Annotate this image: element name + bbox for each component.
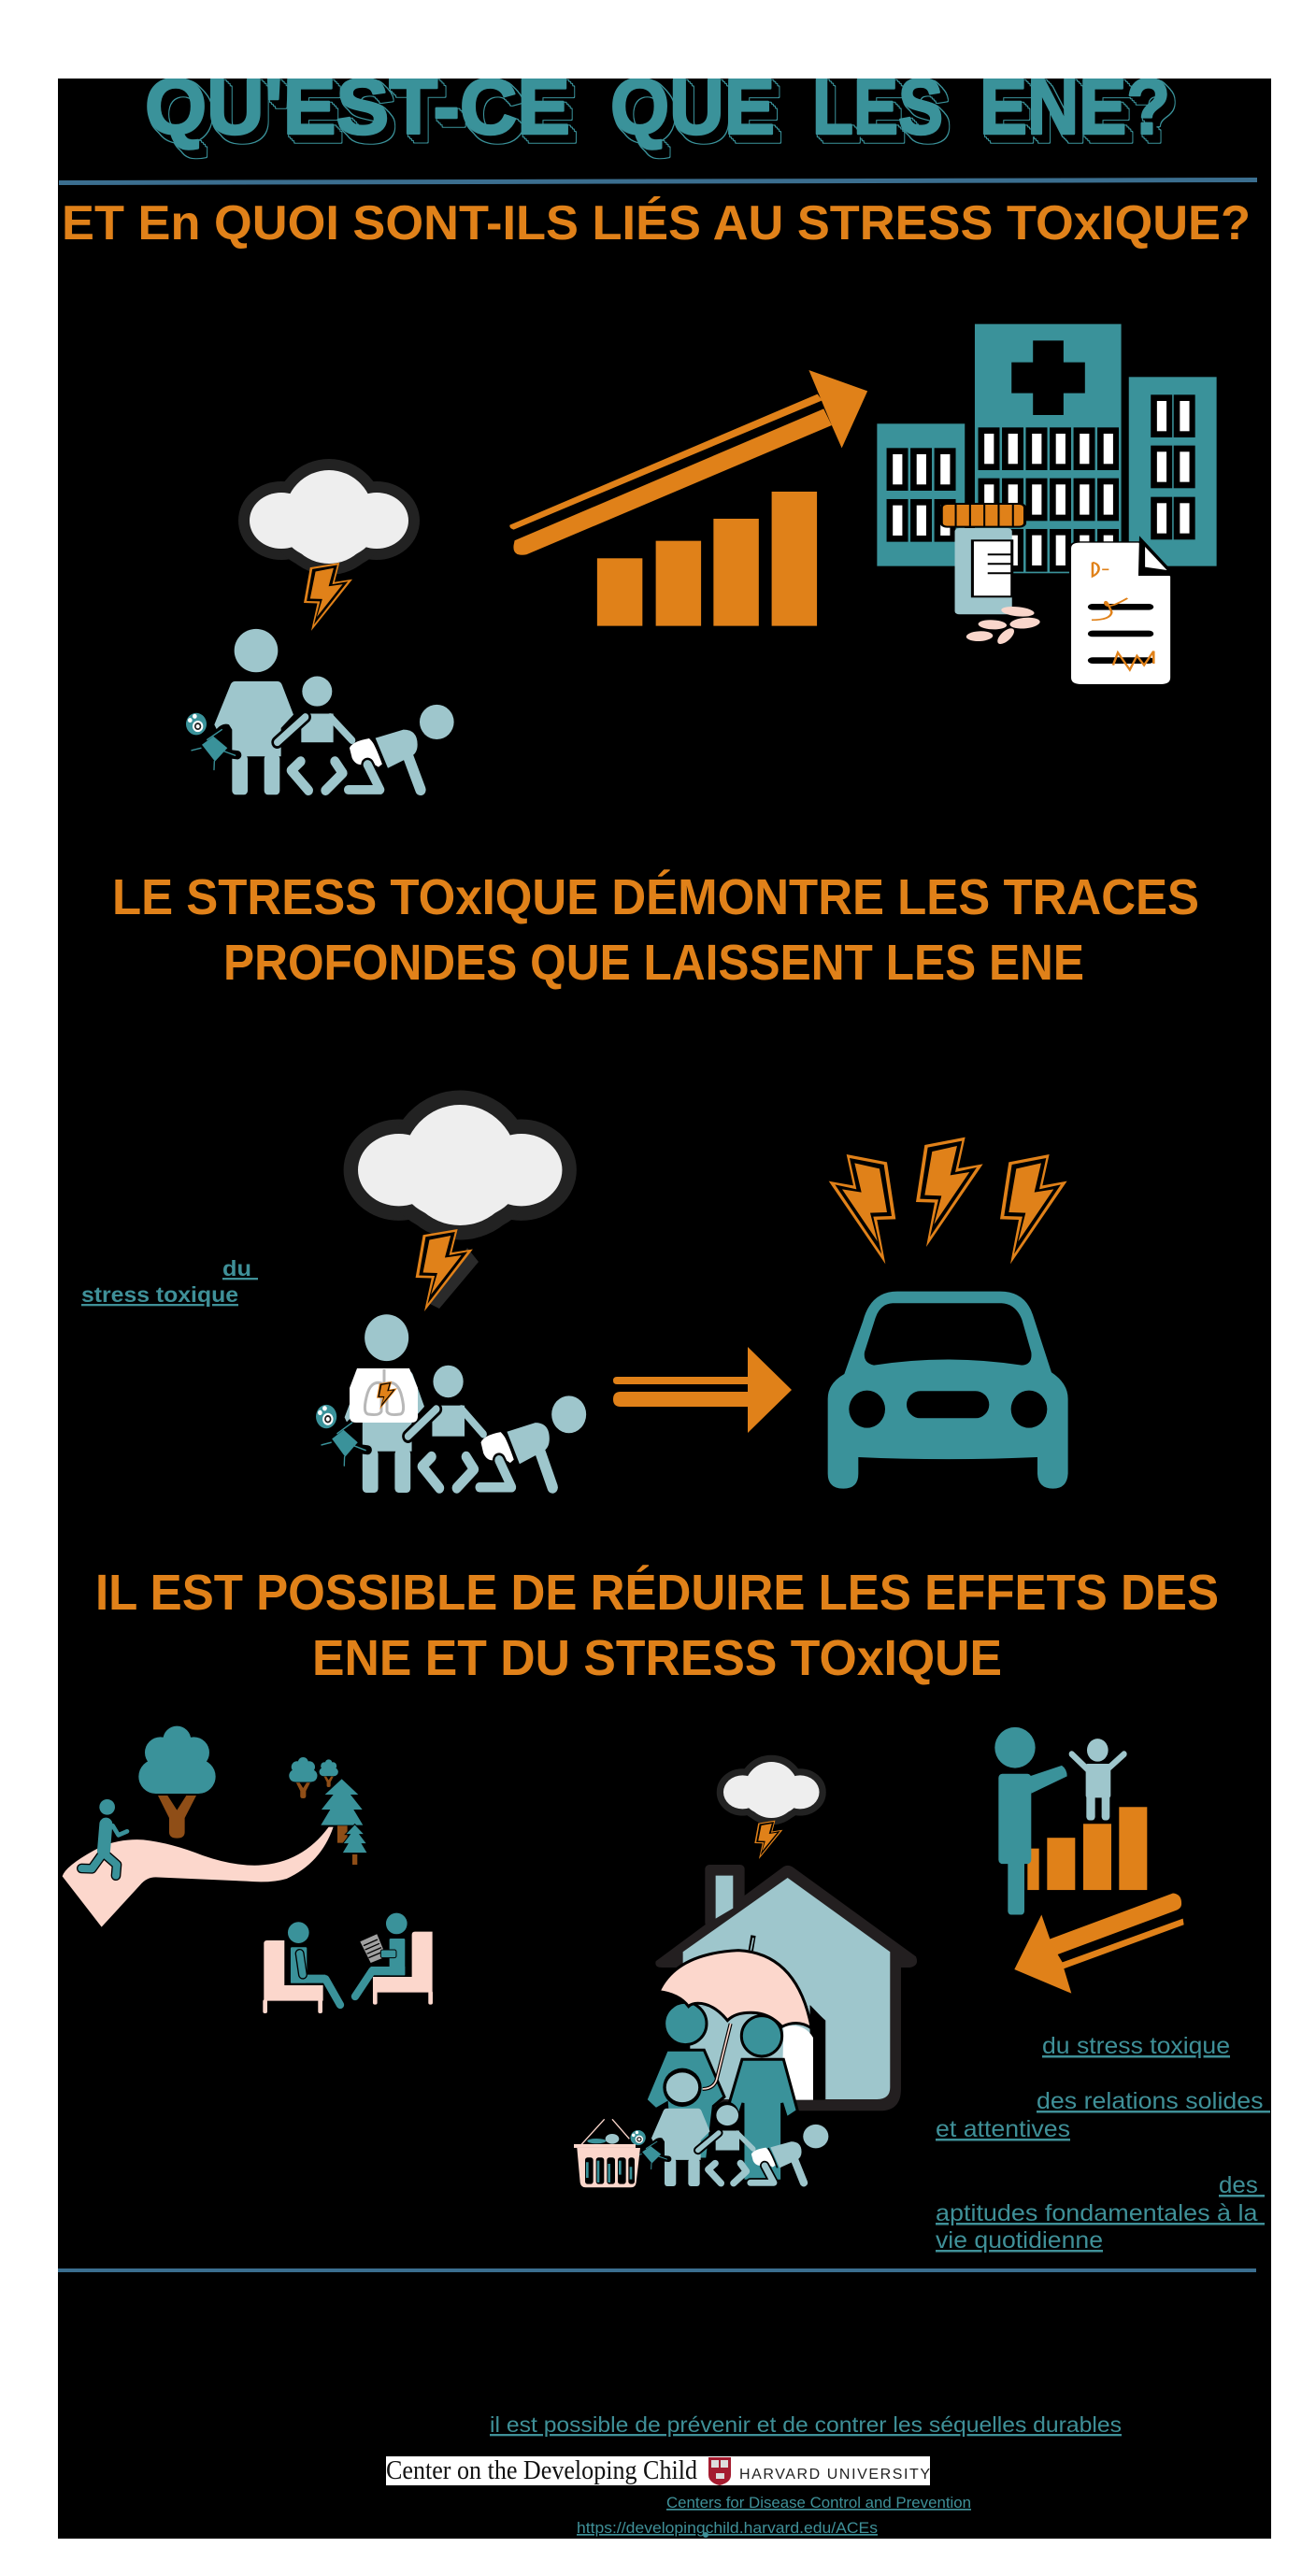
icon: adult supporting child on bars [994, 1727, 1147, 1914]
arrow: reducing arrow pointing down-left [1014, 1894, 1184, 1994]
title: ENE? [980, 63, 1170, 150]
heading: effects can be reduced: ENE ET DU STRESS TOxIQUE [312, 1630, 1002, 1686]
text block: conclusion: il est possible de prévenir et de contrer les séquelles durables [490, 2412, 1122, 2437]
heading: effects can be reduced: IL EST POSSIBLE DE RÉDUIRE LES EFFETS DES [95, 1565, 1219, 1621]
title [145, 63, 1170, 150]
text block: list of protective factors [936, 2033, 1270, 2254]
text block: toxic stress link [81, 1256, 258, 1307]
text block: list of protective factors: vie quotidienne [936, 2227, 1103, 2254]
heading: toxic stress leaves deep traces [112, 869, 1199, 991]
text block: list of protective factors: des relations solides [1037, 2088, 1270, 2114]
heading: toxic stress leaves deep traces: PROFONDES QUE LAISSENT LES ENE [223, 935, 1084, 991]
text block: sources [577, 2494, 971, 2538]
logo: Center on the Developing Child, Harvard University: Center on the Developing Child [386, 2455, 697, 2485]
title: LES [812, 63, 943, 150]
divider: bottom rule [58, 2268, 1256, 2272]
icon: car with lightning bolts [828, 1138, 1068, 1489]
heading: toxic stress leaves deep traces: LE STRESS TOxIQUE DÉMONTRE LES TRACES [112, 869, 1199, 925]
text block: list of protective factors: des [1219, 2172, 1265, 2198]
icon: hospital, medicine and prescription [877, 324, 1217, 685]
logo: Center on the Developing Child, Harvard University: HARVARD UNIVERSITY [739, 2467, 930, 2483]
icon: family under large storm with lungs [316, 1105, 586, 1493]
title: QU'EST-CE [145, 63, 570, 150]
arrow: double right arrow [613, 1347, 792, 1433]
text block: list of protective factors: aptitudes fondamentales à la [936, 2200, 1265, 2226]
title: QUE [610, 63, 775, 150]
icon: counselling session [263, 1913, 433, 2013]
icon: path through trees with walker [63, 1726, 367, 1927]
divider: top rule [59, 178, 1257, 185]
text block: toxic stress link: stress toxique [81, 1282, 238, 1307]
text block: toxic stress link: du [222, 1256, 258, 1281]
icon: family under storm cloud [186, 470, 454, 794]
logo: Center on the Developing Child, Harvard University [386, 2455, 930, 2485]
text block: list of protective factors: et attentives [936, 2116, 1070, 2142]
heading: subtitle: ET En QUOI SONT-ILS LIÉS AU STRESS TOxIQUE? [62, 196, 1251, 250]
text block: list of protective factors: du stress toxique [1042, 2033, 1230, 2059]
text block: sources: https://developingchild.harvard.edu/ACEs [577, 2519, 878, 2537]
text block: sources: Centers for Disease Control and Prevention [666, 2494, 971, 2512]
icon: protected family with house and umbrella [574, 1762, 917, 2187]
heading: effects can be reduced [95, 1565, 1219, 1686]
chart: rising bars with arrow [509, 370, 867, 626]
